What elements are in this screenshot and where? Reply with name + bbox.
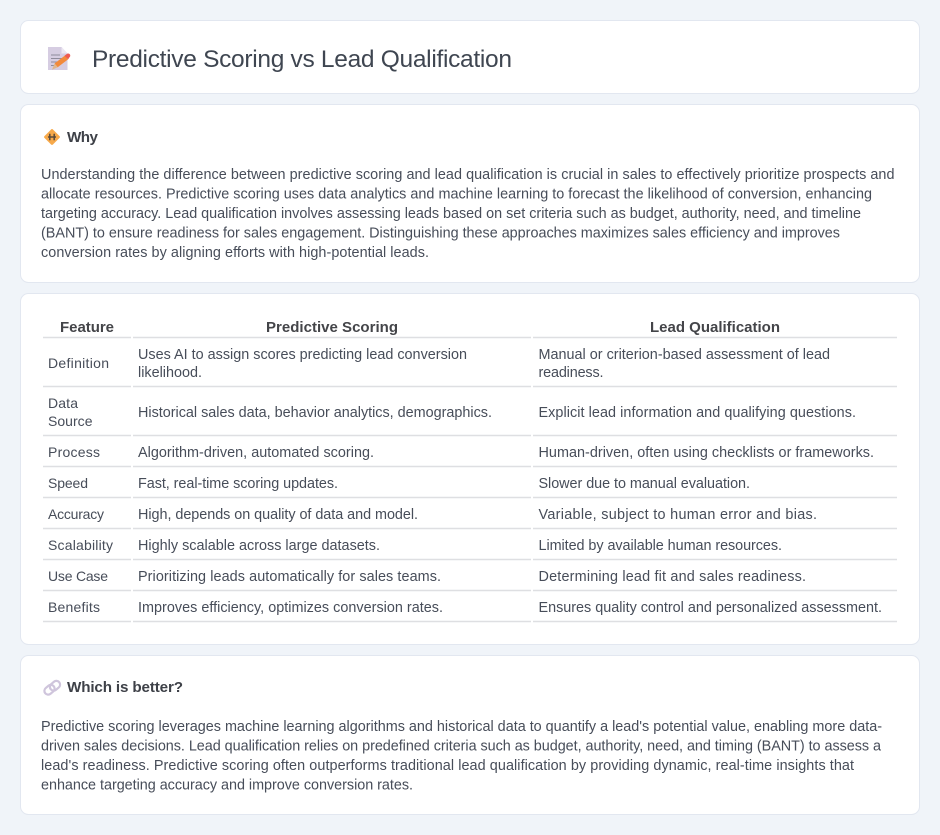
- row: benefits: Benefits: [48, 599, 100, 615]
- row: process: Human-driven, often using checklists or frameworks.: [538, 445, 874, 461]
- row: accuracy: High, depends on quality of data and model.: [138, 507, 418, 523]
- row: definition: readiness.: [538, 365, 604, 381]
- icon: orange diamond sign: [44, 129, 60, 145]
- row: definition: Uses AI to assign scores predicting lead conversion: [138, 347, 467, 363]
- row: process: Process: [48, 444, 100, 460]
- row: speed: [48, 475, 750, 492]
- icon: link: [43, 679, 62, 696]
- row: scalability: Limited by available human resources.: [538, 538, 782, 554]
- row: accuracy: Variable, subject to human error and bias.: [538, 507, 817, 523]
- text block: why paragraph: allocate resources. Predictive scoring uses data analytics and machine learning to forecast the likelihood of conversion, enhancing: [41, 186, 872, 202]
- text block: which is better paragraph: enhance targeting accuracy and improve conversion rates.: [41, 778, 413, 794]
- text block: why paragraph: conversion rates by aligning efforts with high-potential leads.: [41, 245, 429, 261]
- table header row: Feature: [60, 319, 114, 336]
- row: definition: likelihood.: [138, 365, 202, 381]
- table header row: Lead Qualification: [650, 319, 780, 336]
- row: benefits: Improves efficiency, optimizes conversion rates.: [138, 600, 443, 616]
- row: speed: Fast, real-time scoring updates.: [138, 476, 338, 492]
- row: benefits: Ensures quality control and personalized assessment.: [538, 600, 882, 616]
- row: scalability: Scalability: [48, 537, 113, 553]
- row: data source: Data: [48, 395, 78, 411]
- heading: why: Why: [67, 129, 99, 146]
- icon: memo with pencil: [48, 47, 70, 70]
- row: use case: Use Case: [48, 568, 108, 584]
- text block: why paragraph: [41, 167, 894, 261]
- row: benefits: [48, 599, 882, 616]
- row: definition: Definition: [48, 355, 109, 371]
- row: definition: Manual or criterion-based assessment of lead: [538, 347, 830, 363]
- row: data source: Historical sales data, behavior analytics, demographics.: [138, 405, 492, 421]
- row: process: [48, 444, 874, 461]
- row: accuracy: Accuracy: [48, 506, 104, 522]
- row: use case: [48, 568, 806, 585]
- row: definition: [48, 347, 830, 381]
- row: process: Algorithm-driven, automated scoring.: [138, 445, 374, 461]
- row: scalability: [48, 537, 782, 554]
- row: accuracy: [48, 506, 817, 523]
- row: data source: Source: [48, 413, 93, 429]
- panel: which is better: [20, 656, 920, 814]
- row: data source: [48, 395, 856, 429]
- row: use case: Prioritizing leads automatically for sales teams.: [138, 569, 441, 585]
- text block: which is better paragraph: Predictive scoring leverages machine learning algorithms and historical data to quantify a lead's potential value, enabling more data-: [41, 719, 882, 735]
- panel: header: [20, 20, 920, 94]
- title: Predictive Scoring vs Lead Qualification: [92, 46, 512, 73]
- text block: why paragraph: Understanding the difference between predictive scoring and lead qualification is crucial in sales to effectively prioritize prospects and: [41, 167, 894, 183]
- row: speed: Slower due to manual evaluation.: [538, 476, 750, 492]
- text block: which is better paragraph: lead's readiness. Predictive scoring often outperforms traditional lead qualification by providing dynamic, real-time insights that: [41, 758, 854, 774]
- text block: why paragraph: targeting accuracy. Lead qualification involves assessing leads based on set criteria such as budget, authority, need, and timeline: [41, 206, 861, 222]
- table rules: [43, 338, 897, 622]
- row: use case: Determining lead fit and sales readiness.: [538, 569, 806, 585]
- heading: which is better: Which is better?: [67, 679, 183, 696]
- table header row: [60, 319, 780, 336]
- row: speed: Speed: [48, 475, 88, 491]
- panel: comparison table: [20, 294, 920, 644]
- table header row: Predictive Scoring: [266, 319, 398, 336]
- panel: why: [20, 104, 920, 282]
- text block: why paragraph: (BANT) to ensure readiness for sales engagement. Distinguishing these approaches maximizes sales efficiency and improves: [41, 226, 840, 242]
- row: data source: Explicit lead information and qualifying questions.: [538, 405, 856, 421]
- text block: which is better paragraph: [41, 719, 882, 794]
- row: scalability: Highly scalable across large datasets.: [138, 538, 380, 554]
- text block: which is better paragraph: driven sales decisions. Lead qualification relies on predefined criteria such as budget, authority, need, and timing (BANT) to assess a: [41, 738, 881, 754]
